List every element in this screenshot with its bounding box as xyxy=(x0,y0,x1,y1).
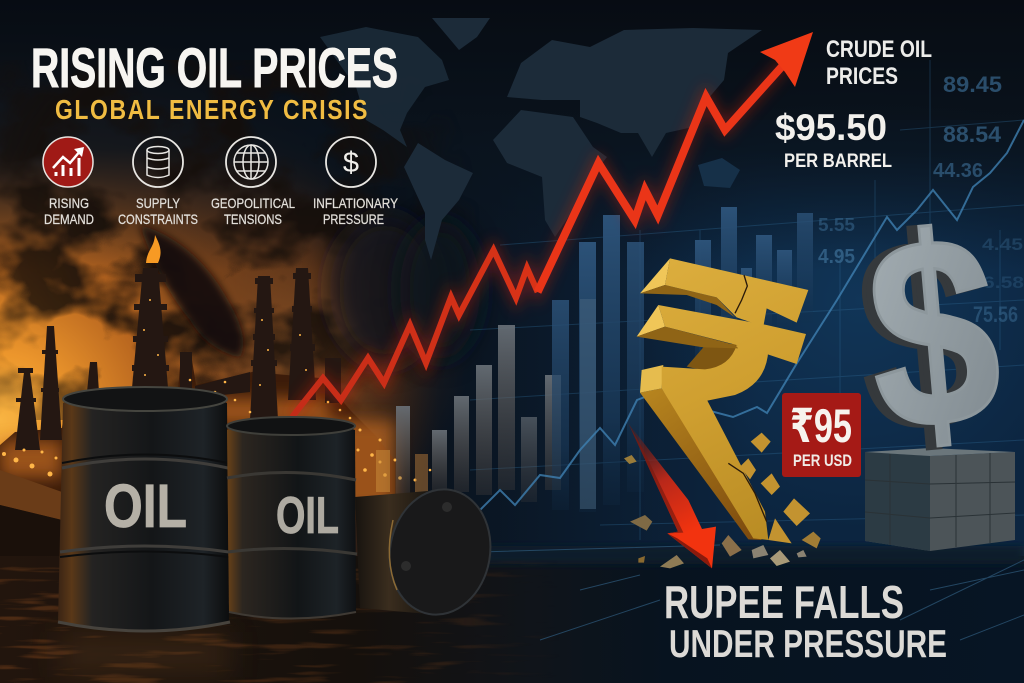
icon labels: RISING xyxy=(49,195,89,211)
rupee middle bar xyxy=(637,305,806,364)
icon labels: INFLATIONARY xyxy=(313,195,399,211)
faint market numbers: 4.45 xyxy=(982,235,1023,254)
dollar symbol: $ xyxy=(847,179,1000,491)
rupee leg and bowl xyxy=(640,343,768,540)
icon labels: CONSTRAINTS xyxy=(118,211,198,227)
icon: globe xyxy=(226,137,276,187)
oil price xyxy=(775,107,892,172)
red price badge: ₹95 xyxy=(790,399,852,452)
faint market numbers: 5.55 xyxy=(818,215,855,235)
ground xyxy=(0,545,1024,683)
icon labels: TENSIONS xyxy=(224,211,282,227)
pipeline xyxy=(0,470,62,520)
dollar symbol: $ xyxy=(857,177,1010,489)
chart grid lines xyxy=(470,60,1024,540)
icon labels: GEOPOLITICAL xyxy=(211,195,295,211)
subtitle: GLOBAL ENERGY CRISIS xyxy=(55,95,367,126)
icon labels: PRESSURE xyxy=(323,211,384,227)
oil barrel: medium xyxy=(227,417,357,618)
rupee top bar xyxy=(640,258,808,327)
refinery skyline xyxy=(0,235,431,556)
oil barrel: lying on its side xyxy=(355,481,500,623)
oil price: $95.50 xyxy=(775,107,887,148)
flare flame xyxy=(146,235,161,263)
world map xyxy=(320,18,762,260)
icon labels: DEMAND xyxy=(44,211,94,227)
rupee fragments xyxy=(624,433,821,568)
oil barrel: large: OIL xyxy=(104,472,187,540)
oil price: PER BARREL xyxy=(784,151,892,172)
rising red arrow xyxy=(292,32,813,417)
oil barrel: large xyxy=(58,387,230,631)
rupee falls headline: UNDER PRESSURE xyxy=(669,623,947,666)
icon: dollar xyxy=(326,137,376,187)
blue trend line xyxy=(478,120,1024,512)
faint market numbers: 4.95 xyxy=(818,246,855,268)
title: RISING OIL PRICES xyxy=(31,36,398,99)
background sky and smoke xyxy=(0,60,1024,556)
icon labels xyxy=(44,195,399,227)
faint market numbers: 89.45 xyxy=(943,72,1002,97)
icon: dollar: $ xyxy=(343,147,359,179)
crude oil label: CRUDE OIL xyxy=(826,36,932,63)
crude oil label: PRICES xyxy=(826,63,898,90)
dollar pedestal xyxy=(865,448,1015,551)
crude oil label xyxy=(826,36,932,90)
icon: oil barrel xyxy=(133,137,183,187)
red price badge xyxy=(782,393,861,477)
oil barrel: medium: OIL xyxy=(276,487,339,545)
rupee falls headline xyxy=(664,576,947,666)
rupee falls headline: RUPEE FALLS xyxy=(664,576,904,628)
falling red arrow xyxy=(628,423,716,568)
icon: rising demand xyxy=(43,137,93,187)
faint market numbers xyxy=(818,72,1024,327)
faint market numbers: 44.36 xyxy=(933,160,983,182)
bar chart xyxy=(376,207,813,512)
red price badge: PER USD xyxy=(793,452,852,470)
faint market numbers: 88.54 xyxy=(943,122,1002,147)
icon labels: SUPPLY xyxy=(136,195,181,211)
faint market numbers: 6.58 xyxy=(983,273,1024,292)
rupee symbol xyxy=(637,258,808,540)
icon row xyxy=(43,137,376,187)
